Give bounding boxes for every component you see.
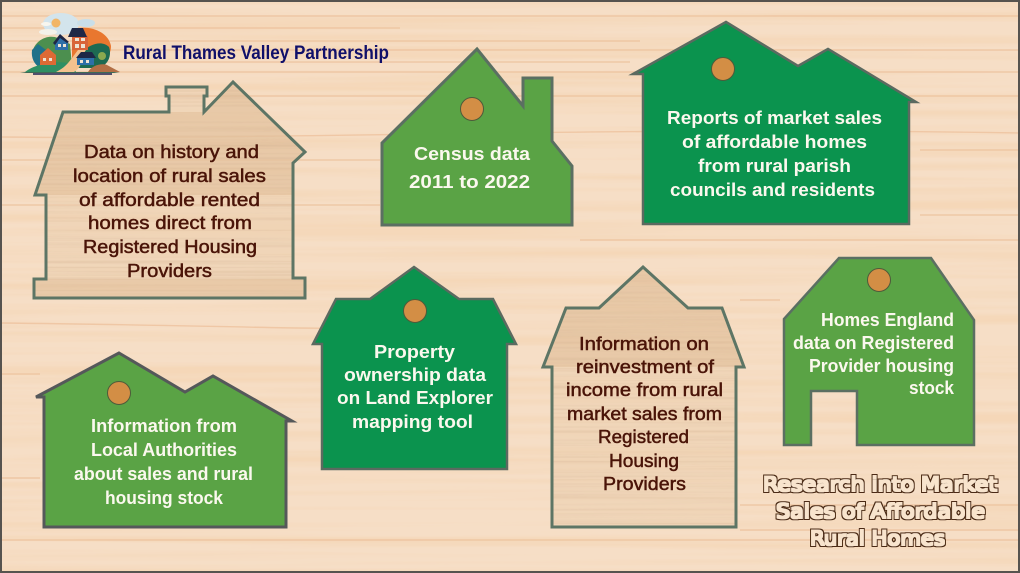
house text: of affordable homes: [682, 131, 867, 152]
house text: 2011 to 2022: [409, 171, 530, 192]
title: [763, 473, 997, 550]
house text: location of rural sales: [73, 165, 266, 186]
house text: Reports of market sales: [667, 107, 882, 128]
house text: on Land Explorer: [337, 387, 493, 408]
house text: Property: [374, 341, 456, 362]
house: registered housing providers data: [30, 80, 310, 300]
house text: mapping tool: [352, 411, 473, 432]
house text: about sales and rural: [74, 463, 253, 484]
house text: from rural parish: [698, 155, 851, 176]
house: census data: [382, 49, 572, 225]
house text: homes direct from: [88, 212, 252, 233]
icon: round window: [108, 382, 130, 404]
house text: [793, 309, 955, 398]
house text: [337, 341, 493, 432]
house text: market sales from: [567, 403, 722, 424]
lower blue house: [77, 55, 94, 65]
house: parish council reports: [633, 22, 916, 224]
house text: Information on: [579, 333, 709, 354]
house text: income from rural: [566, 379, 723, 400]
house text: data on Registered: [793, 332, 954, 353]
house: land explorer data: [313, 267, 516, 469]
orange house: [40, 48, 56, 65]
house: reinvestment information: [540, 265, 746, 529]
house text: Local Authorities: [91, 439, 237, 460]
blue house: [55, 37, 68, 50]
title: Sales of Affordable: [776, 500, 985, 523]
house text: ownership data: [344, 364, 487, 385]
big house: [72, 34, 88, 50]
house text: [74, 415, 253, 508]
logo: [20, 13, 120, 74]
house text: stock: [909, 377, 955, 398]
house text: of affordable rented: [79, 189, 260, 210]
house: local authorities information: [36, 353, 292, 527]
icon: round window: [404, 300, 426, 322]
house text: Data on history and: [84, 141, 259, 162]
house text: Census data: [414, 143, 531, 164]
title: Research into Market: [763, 473, 997, 496]
house text: Providers: [127, 260, 212, 281]
icon: round window: [868, 268, 890, 292]
house text: councils and residents: [670, 179, 875, 200]
house text: Information from: [91, 415, 237, 436]
house text: [566, 333, 723, 494]
house text: Registered: [598, 426, 689, 447]
house text: [409, 143, 531, 192]
house text: reinvestment of: [576, 356, 715, 377]
house text: [667, 107, 882, 200]
house text: housing stock: [105, 487, 224, 508]
icon: round window: [460, 98, 484, 120]
house: homes england data: [784, 258, 974, 445]
house text: Providers: [603, 473, 686, 494]
house text: [73, 141, 266, 281]
organisation name: Rural Thames Valley Partnership: [123, 42, 389, 64]
house text: Provider housing: [809, 355, 954, 376]
title: Rural Homes: [810, 527, 945, 550]
icon: round window: [712, 58, 734, 80]
house text: Registered Housing: [83, 236, 257, 257]
house text: Housing: [609, 450, 679, 471]
house text: Homes England: [821, 309, 954, 330]
icon: sun: [52, 18, 60, 28]
